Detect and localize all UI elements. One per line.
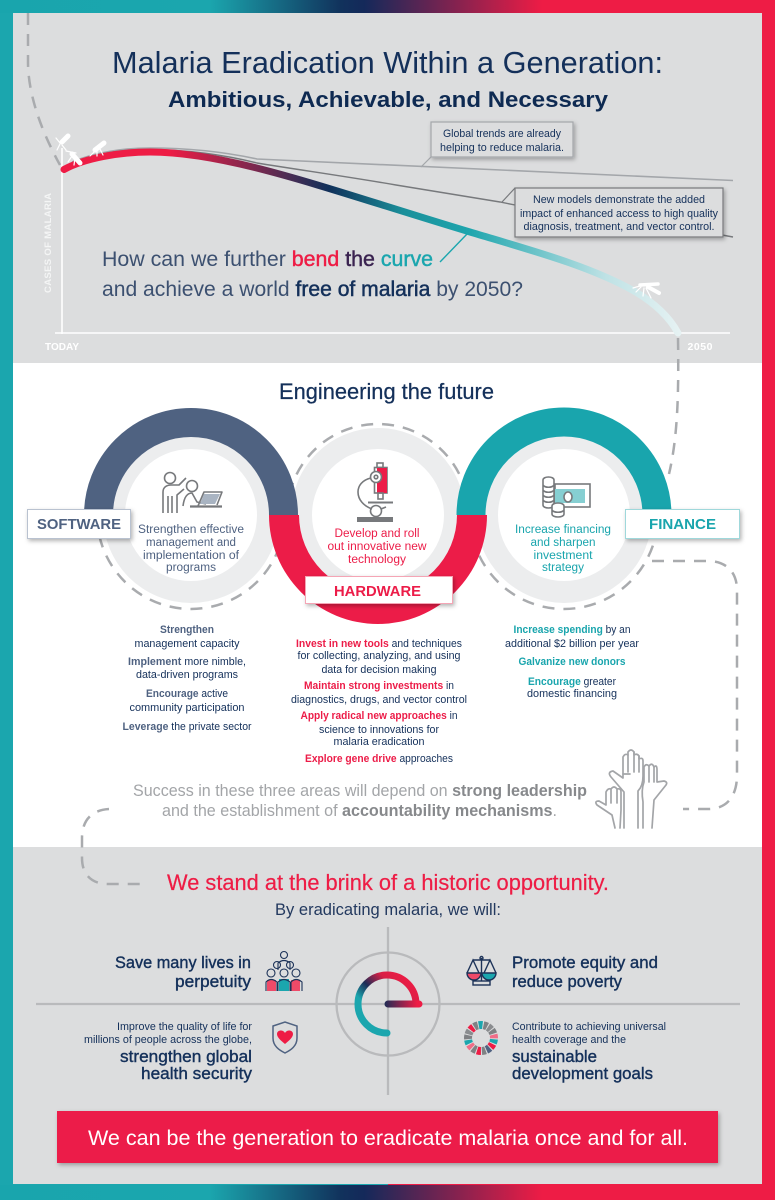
benefit: sustainable development: sustainable — [512, 1047, 597, 1066]
callout: new models: New models demonstrate the added — [533, 194, 705, 206]
text: success depends on leadership: Success in these three areas will depend on strong leadership — [133, 781, 587, 800]
software text: management and — [146, 537, 236, 549]
trend line: new models — [72, 149, 733, 237]
callout: new models: diagnosis, treatment, and vector control. — [524, 221, 714, 233]
dashed path: 2050 into finance — [669, 338, 678, 474]
icon: raised hands — [596, 750, 667, 828]
list: hardware actions: diagnostics, drugs, and vector control — [291, 694, 467, 706]
list: finance actions: Galvanize new donors — [518, 656, 626, 668]
list: hardware actions: malaria eradication — [334, 736, 424, 748]
software text: implementation of — [143, 550, 240, 562]
axis label: today: TODAY — [45, 342, 79, 353]
section heading: engineering the future: Engineering the future — [279, 379, 494, 404]
benefit: equity — [467, 953, 658, 991]
curve: bend the curve — [64, 152, 678, 333]
finance text: strategy — [542, 562, 584, 574]
list: finance actions: domestic financing — [527, 688, 617, 700]
list: finance actions — [505, 624, 639, 700]
callout: global trends — [431, 122, 573, 157]
benefit: global health security: strengthen global — [120, 1047, 252, 1066]
list: finance actions: Increase spending by an — [514, 624, 630, 636]
label: finance — [626, 510, 740, 538]
panel: opportunity background — [13, 847, 762, 1184]
title — [112, 45, 663, 112]
malaria e-logo bar — [388, 1000, 419, 1008]
closing banner — [57, 1111, 718, 1163]
hardware text: Develop and roll — [334, 528, 420, 540]
list: finance actions: Encourage greater — [528, 676, 616, 688]
finance text: and sharpen — [530, 537, 596, 549]
label: finance: FINANCE — [649, 516, 716, 533]
list: software actions: management capacity — [134, 638, 240, 650]
text: success depends on leadership — [133, 781, 587, 820]
list: hardware actions — [291, 638, 467, 765]
list: hardware actions: Explore gene drive approaches — [305, 753, 454, 765]
label: hardware — [306, 576, 452, 604]
crosshair diagram — [36, 927, 740, 1095]
icon: shield with heart — [273, 1022, 297, 1053]
axes — [55, 148, 730, 334]
list: software actions: Implement more nimble, — [128, 656, 246, 668]
subtitle: Ambitious, Achievable, and Necessary — [168, 87, 609, 112]
hardware disc — [287, 424, 469, 540]
question text: and achieve a world free of malaria by 2050? — [102, 277, 523, 301]
list: finance actions: additional $2 billion per year — [505, 638, 639, 650]
icon: coins and banknote — [543, 477, 590, 517]
list: software actions: Encourage active — [146, 688, 228, 700]
dashed path: top left into curve — [28, 13, 60, 165]
benefit: global health security: millions of people across the globe, — [84, 1034, 252, 1046]
icon: sdg ring — [466, 1023, 496, 1053]
hardware text: technology — [348, 554, 406, 566]
finance text: Increase financing — [515, 524, 611, 536]
subheading: by eradicating malaria: By eradicating malaria, we will: — [275, 900, 501, 919]
crosshair lines — [36, 927, 740, 1095]
hardware text — [328, 528, 427, 566]
list: software actions: Strengthen — [160, 624, 214, 636]
benefit: sustainable development: health coverage and the — [512, 1034, 626, 1046]
list: hardware actions: Apply radical new approaches in — [300, 710, 458, 722]
panel: chart header background — [13, 13, 762, 363]
finance ring — [470, 422, 658, 609]
axis label: 2050: 2050 — [688, 341, 713, 353]
label: software: SOFTWARE — [37, 516, 121, 533]
list: hardware actions: Maintain strong investments in — [304, 680, 454, 692]
icon: scales — [467, 956, 496, 985]
icon: software people with laptop — [163, 472, 222, 513]
finance text — [515, 524, 611, 574]
hardware text: out innovative new — [328, 541, 427, 553]
title: Malaria Eradication Within a Generation: — [112, 45, 663, 80]
icon: mosquito 2050 — [633, 284, 659, 298]
benefit: sustainable development: development goals — [512, 1064, 653, 1083]
software text: Strengthen effective — [138, 524, 244, 536]
list: hardware actions: Invest in new tools and techniques — [296, 638, 463, 650]
list: software actions: Leverage the private sector — [122, 721, 252, 733]
question text — [102, 247, 523, 301]
benefit: global health security — [84, 1021, 297, 1083]
panel: engineering the future background — [13, 363, 762, 847]
software ring — [97, 423, 285, 609]
icon: microscope — [357, 463, 393, 522]
icon: mosquito today 3 — [90, 143, 104, 156]
callout leader: question — [440, 233, 468, 262]
crosshair circle — [336, 952, 440, 1056]
benefit: save lives: Save many lives in — [115, 953, 251, 972]
callout leader: new models — [502, 188, 515, 202]
benefit: sustainable development — [466, 1021, 666, 1083]
software text — [138, 524, 244, 574]
engineering diagram — [28, 422, 740, 624]
hardware ring — [269, 449, 487, 624]
software text: programs — [166, 562, 216, 574]
benefit: global health security: health security — [141, 1064, 252, 1083]
icon: mosquito today 2 — [66, 151, 80, 165]
finance text: investment — [534, 550, 593, 562]
list: hardware actions: science to innovations for — [319, 724, 439, 736]
callout: new models: impact of enhanced access to high quality — [520, 208, 718, 220]
closing banner: We can be the generation to eradicate malaria once and for all. — [88, 1126, 688, 1150]
text: success depends on leadership: and the establishment of accountability mechanisms. — [162, 801, 557, 820]
benefit: sustainable development: Contribute to achieving universal — [512, 1021, 666, 1033]
list: software actions: data-driven programs — [136, 669, 239, 681]
heading: historic opportunity: We stand at the brink of a historic opportunity. — [167, 870, 609, 895]
list: hardware actions: data for decision making — [322, 664, 436, 676]
benefit: save lives: perpetuity — [175, 972, 251, 991]
chart: bend the curve — [43, 122, 733, 353]
icon: mosquito today 1 — [56, 136, 68, 150]
list: software actions — [122, 624, 252, 733]
callout leader: global trends — [421, 157, 431, 167]
benefit: equity: Promote equity and — [512, 953, 658, 972]
question text: How can we further bend the curve — [102, 247, 433, 271]
malaria e-logo arc — [358, 975, 416, 1033]
callout: new models — [515, 188, 723, 237]
icon: people — [266, 952, 302, 991]
dashed path: finance to hands — [652, 561, 737, 809]
list: software actions: community participation — [130, 702, 244, 714]
axis label: cases of malaria: CASES OF MALARIA — [43, 193, 54, 293]
dashed path: text to lower section — [82, 809, 143, 884]
callout: global trends: helping to reduce malaria. — [440, 142, 564, 154]
label: hardware: HARDWARE — [334, 583, 421, 600]
callout: global trends: Global trends are already — [443, 128, 561, 140]
list: hardware actions: for collecting, analyzing, and using — [298, 650, 460, 662]
benefit: save lives — [115, 952, 302, 991]
trend line: global trends — [72, 148, 733, 180]
benefit: global health security: Improve the quality of life for — [117, 1021, 252, 1033]
label: software — [28, 510, 130, 538]
benefit: equity: reduce poverty — [512, 972, 622, 991]
